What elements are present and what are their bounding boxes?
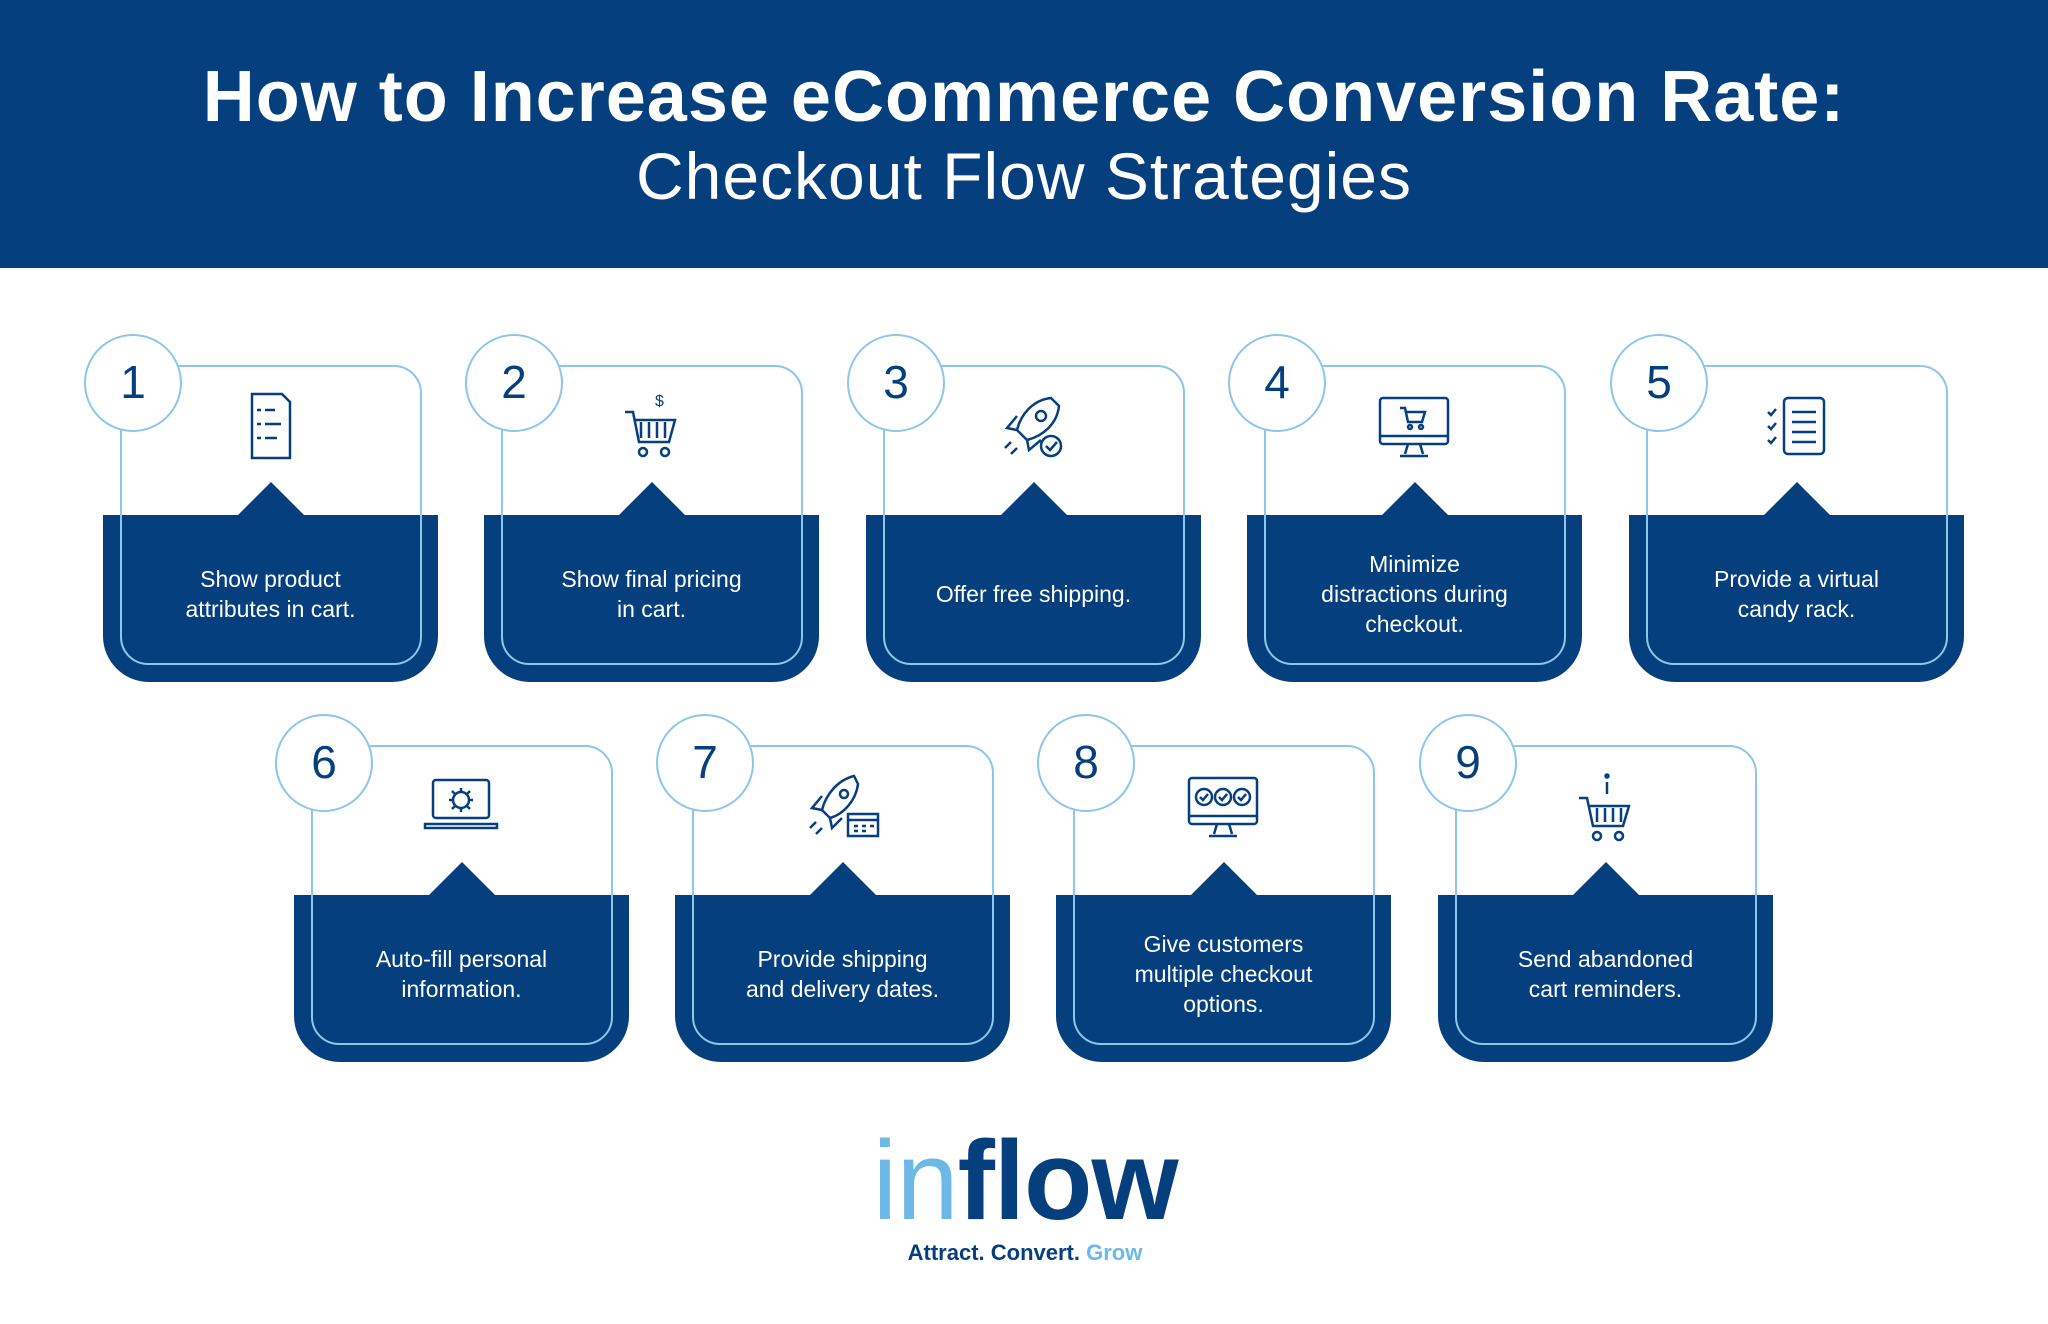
text: card 9 (1438, 895, 1773, 1062)
card 7 (656, 714, 1010, 1062)
number 8 (1037, 714, 1135, 812)
text: card 8: multiple checkout (1135, 960, 1312, 986)
text: card 8: options. (1183, 990, 1264, 1016)
text: card 4: checkout. (1365, 610, 1464, 636)
icon: monitor with cart (1378, 396, 1450, 458)
icon: monitor with three checks (1188, 776, 1258, 838)
text: card 5: candy rack. (1738, 596, 1855, 622)
number 9 (1419, 714, 1517, 812)
text: card 1: attributes in cart. (185, 596, 356, 622)
number 1: 1 (120, 356, 146, 408)
logo: inflow: inflow (872, 1118, 1178, 1243)
text: card 4: Minimize (1369, 550, 1460, 576)
number 8: 8 (1073, 736, 1099, 788)
number 4: 4 (1264, 356, 1290, 408)
card 3 (847, 334, 1201, 682)
text: card 1 (103, 515, 438, 682)
text: card 7 (675, 895, 1010, 1062)
text: card 6: information. (401, 976, 522, 1002)
icon: checklist (1767, 396, 1826, 456)
icon: cart with info (1579, 773, 1631, 842)
title: How to Increase eCommerce Conversion Rate: (203, 57, 1845, 137)
number 1 (84, 334, 182, 432)
text: card 9: Send abandoned (1518, 946, 1693, 972)
number 6 (275, 714, 373, 812)
icon: numbered list document (250, 392, 292, 460)
text: card 2 (484, 515, 819, 682)
text: card 6: Auto-fill personal (376, 946, 547, 972)
text: card 3 (866, 515, 1201, 682)
text: card 9: cart reminders. (1529, 976, 1682, 1002)
icon: cart with dollar (625, 393, 677, 458)
text: card 1: Show product (200, 566, 341, 592)
card 5 (1610, 334, 1964, 682)
number 7 (656, 714, 754, 812)
card 4 (1228, 334, 1582, 682)
card 1 (84, 334, 438, 682)
number 5 (1610, 334, 1708, 432)
text: card 8 (1056, 895, 1391, 1062)
icon: rocket with calendar (809, 774, 880, 838)
text: card 7: and delivery dates. (746, 976, 939, 1002)
number 3: 3 (883, 356, 909, 408)
number 6: 6 (311, 736, 337, 788)
number 3 (847, 334, 945, 432)
number 4 (1228, 334, 1326, 432)
number 7: 7 (692, 736, 718, 788)
text: card 8: Give customers (1144, 930, 1303, 956)
text: card 7: Provide shipping (757, 946, 928, 972)
card 8 (1037, 714, 1391, 1062)
subtitle: Checkout Flow Strategies (636, 139, 1412, 213)
number 2: 2 (501, 356, 527, 408)
tagline: Attract. Convert. Grow (908, 1240, 1142, 1265)
text: card 2: Show final pricing (561, 566, 742, 592)
icon: cart with dollar: $ (655, 393, 664, 410)
card 6 (275, 714, 629, 1062)
number 9: 9 (1455, 736, 1481, 788)
number 5: 5 (1646, 356, 1672, 408)
text: card 3: Offer free shipping. (936, 580, 1131, 606)
text: card 6 (294, 895, 629, 1062)
text: card 4: distractions during (1321, 580, 1508, 606)
text: card 4 (1247, 515, 1582, 682)
text: card 2: in cart. (617, 596, 686, 622)
text: card 5: Provide a virtual (1714, 566, 1879, 592)
card 2 (465, 334, 819, 682)
icon: rocket with check (1004, 396, 1062, 458)
number 2 (465, 334, 563, 432)
icon: laptop with gear (424, 778, 498, 830)
card 9 (1419, 714, 1773, 1062)
header banner (0, 0, 2048, 268)
text: card 5 (1629, 515, 1964, 682)
